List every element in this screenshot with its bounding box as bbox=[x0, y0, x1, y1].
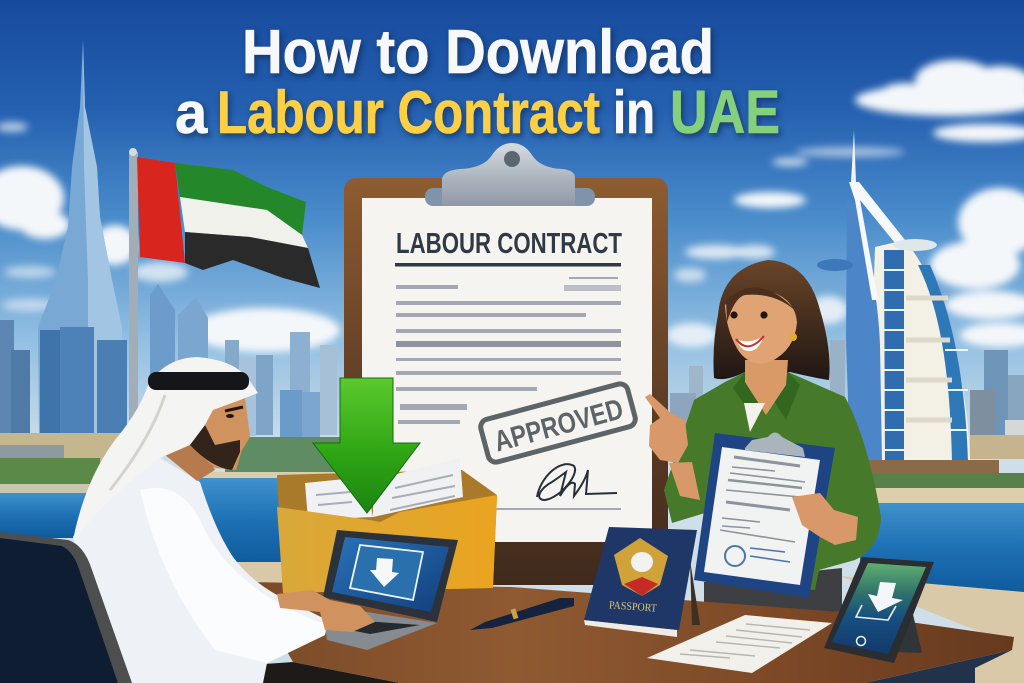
pen bbox=[470, 598, 574, 630]
Burj Al Arab hotel bbox=[817, 130, 970, 462]
pointing hand bbox=[645, 394, 688, 463]
neck and undershirt bbox=[745, 360, 788, 415]
face bbox=[190, 395, 250, 470]
passport: PASSPORT bbox=[609, 599, 658, 615]
forearm bbox=[669, 462, 700, 500]
sail body bbox=[872, 240, 970, 462]
headdress bbox=[73, 357, 258, 540]
neck bbox=[165, 440, 215, 481]
floor bbox=[232, 562, 1024, 683]
clouds bbox=[0, 60, 1024, 352]
black agal bbox=[148, 372, 249, 390]
woman bbox=[645, 260, 881, 612]
blue left column bbox=[846, 200, 882, 462]
clipboard contract bbox=[344, 143, 668, 585]
man in kandura bbox=[73, 357, 327, 683]
sea bbox=[0, 478, 1024, 593]
holding hand bbox=[792, 493, 858, 545]
clipboard board bbox=[344, 178, 668, 585]
UAE flag bbox=[129, 148, 320, 420]
right shore bbox=[865, 460, 1024, 504]
shirt bbox=[664, 372, 881, 590]
approved stamp: APPROVED bbox=[491, 393, 627, 458]
hair bbox=[714, 260, 830, 380]
white arch bbox=[849, 182, 905, 300]
left skyline bbox=[0, 284, 337, 437]
man's hands bbox=[277, 590, 375, 632]
desk bbox=[247, 582, 1014, 683]
title line 2: in: in bbox=[613, 79, 655, 146]
title line 1: How to Download bbox=[242, 18, 714, 87]
signature bbox=[537, 464, 617, 500]
contract heading: LABOUR CONTRACT bbox=[396, 228, 622, 260]
title bbox=[175, 18, 780, 146]
Burj Khalifa tower bbox=[38, 40, 127, 433]
contract text lines bbox=[373, 277, 621, 510]
left shore buildings and greenery bbox=[0, 433, 345, 494]
robe bbox=[73, 458, 327, 683]
paper on desk bbox=[647, 615, 832, 673]
tablet on stand bbox=[824, 557, 934, 663]
passport bbox=[584, 527, 700, 637]
face bbox=[725, 290, 797, 364]
contract paper bbox=[362, 198, 652, 542]
document folder bbox=[277, 458, 497, 593]
skirt bbox=[704, 568, 842, 612]
held clipboard bbox=[694, 432, 835, 598]
held document lines bbox=[720, 457, 805, 562]
chair bbox=[0, 532, 132, 683]
title line 2: Labour Contract: Labour Contract bbox=[217, 79, 600, 146]
laptop bbox=[323, 530, 458, 650]
right skyline bbox=[670, 340, 1024, 462]
title line 2: UAE: UAE bbox=[670, 78, 780, 146]
metal clip bbox=[425, 143, 595, 206]
download arrow bbox=[313, 378, 420, 513]
title line 2: a: a bbox=[175, 81, 208, 146]
